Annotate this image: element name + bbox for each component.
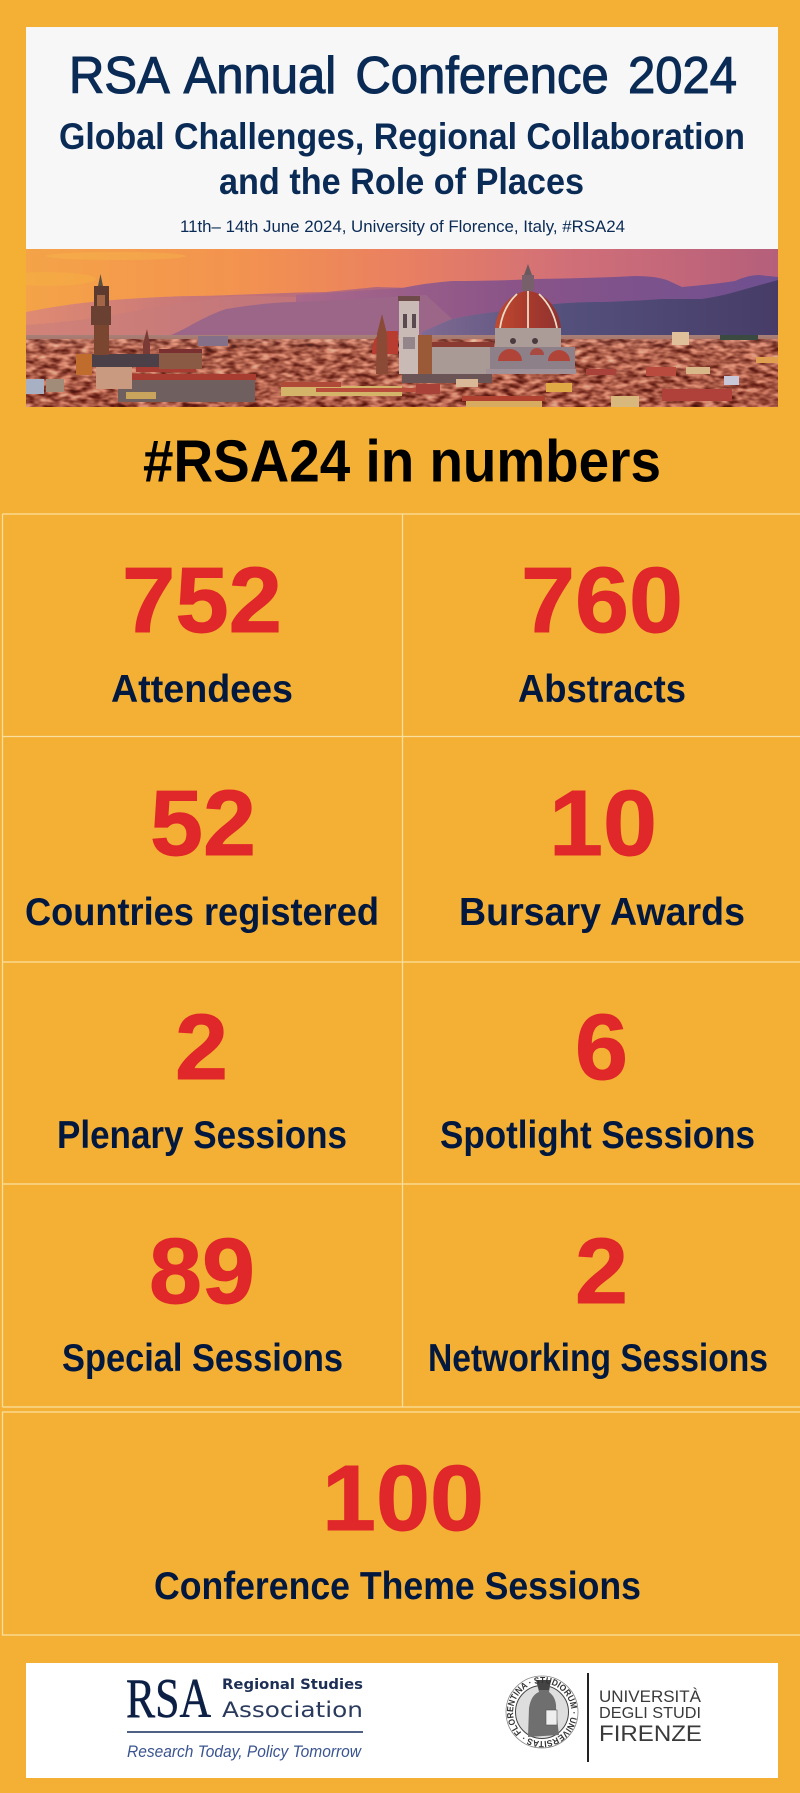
subtitle line 1: Global Challenges, Regional Collaboration [59, 116, 745, 157]
stat: 100 Conference Theme Sessions: 100 [322, 1446, 484, 1550]
stat: 52 Countries registered: 52 [150, 771, 256, 875]
stat: 2 Plenary Sessions: Plenary Sessions [57, 1114, 347, 1157]
stat: 52 Countries registered [25, 771, 379, 934]
stat: 760 Abstracts: 760 [521, 548, 683, 652]
Uffizi and old-town buildings [26, 336, 436, 402]
logo: Università degli Studi di Firenze: UNIVERSITÀ [599, 1687, 701, 1706]
heading: #RSA24 in numbers [143, 428, 661, 494]
city details on the right [416, 332, 778, 407]
stat: 10 Bursary Awards: Bursary Awards [459, 891, 745, 934]
photo: Florence skyline at sunset [0, 249, 778, 407]
stat: 89 Special Sessions: 89 [149, 1219, 255, 1323]
Santa Maria del Fiore cathedral with dome and campanile [372, 264, 576, 383]
footer logo panel [26, 1663, 778, 1778]
stat: 89 Special Sessions: Special Sessions [62, 1337, 343, 1380]
logo: Università degli Studi di Firenze: FIRENZE [599, 1721, 702, 1746]
logo: Università degli Studi di Firenze: DEGLI STUDI [599, 1705, 701, 1722]
stat: 10 Bursary Awards: 10 [549, 771, 657, 875]
stat: 52 Countries registered: Countries registered [25, 891, 379, 934]
stat: 752 Attendees: Attendees [111, 668, 293, 711]
stat: 6 Spotlight Sessions: Spotlight Sessions [440, 1114, 755, 1157]
logo: Regional Studies Association [126, 1668, 363, 1761]
date and location: 11th– 14th June 2024, University of Florence, Italy, #RSA24 [180, 218, 625, 236]
logo: Regional Studies Association: RSA [126, 1668, 211, 1730]
stat: 2 Plenary Sessions [57, 995, 347, 1157]
stat: 752 Attendees [111, 548, 293, 711]
stat: 2 Plenary Sessions: 2 [175, 995, 228, 1099]
icon: university seal: FLORENTINA · STUDIORUM · UNIVERSITAS · [506, 1676, 578, 1748]
city rooftops [26, 335, 778, 407]
title: RSA Annual Conference 2024 [69, 47, 737, 105]
stat: 100 Conference Theme Sessions: Conference Theme Sessions [154, 1565, 641, 1608]
logo: Regional Studies Association: Association [222, 1698, 363, 1722]
logo: Università degli Studi di Firenze [506, 1673, 702, 1762]
stat: 2 Networking Sessions [428, 1219, 768, 1380]
stats grid lines [2, 514, 800, 1635]
stat: 752 Attendees: 752 [122, 548, 282, 652]
stat: 6 Spotlight Sessions [440, 995, 755, 1157]
stat: 10 Bursary Awards [459, 771, 745, 934]
stat: 100 Conference Theme Sessions [154, 1446, 641, 1608]
stat: 89 Special Sessions [62, 1219, 343, 1380]
logo: Regional Studies Association: Research Today, Policy Tomorrow [127, 1742, 363, 1761]
logo: Regional Studies Association: Regional Studies [222, 1677, 363, 1693]
stat: 2 Networking Sessions: 2 [575, 1219, 628, 1323]
stat: 760 Abstracts [518, 548, 686, 711]
header panel [26, 27, 778, 249]
Palazzo Vecchio [76, 274, 202, 375]
subtitle line 2: and the Role of Places [219, 161, 584, 202]
stat: 6 Spotlight Sessions: 6 [575, 995, 628, 1099]
stat: 760 Abstracts: Abstracts [518, 668, 686, 711]
